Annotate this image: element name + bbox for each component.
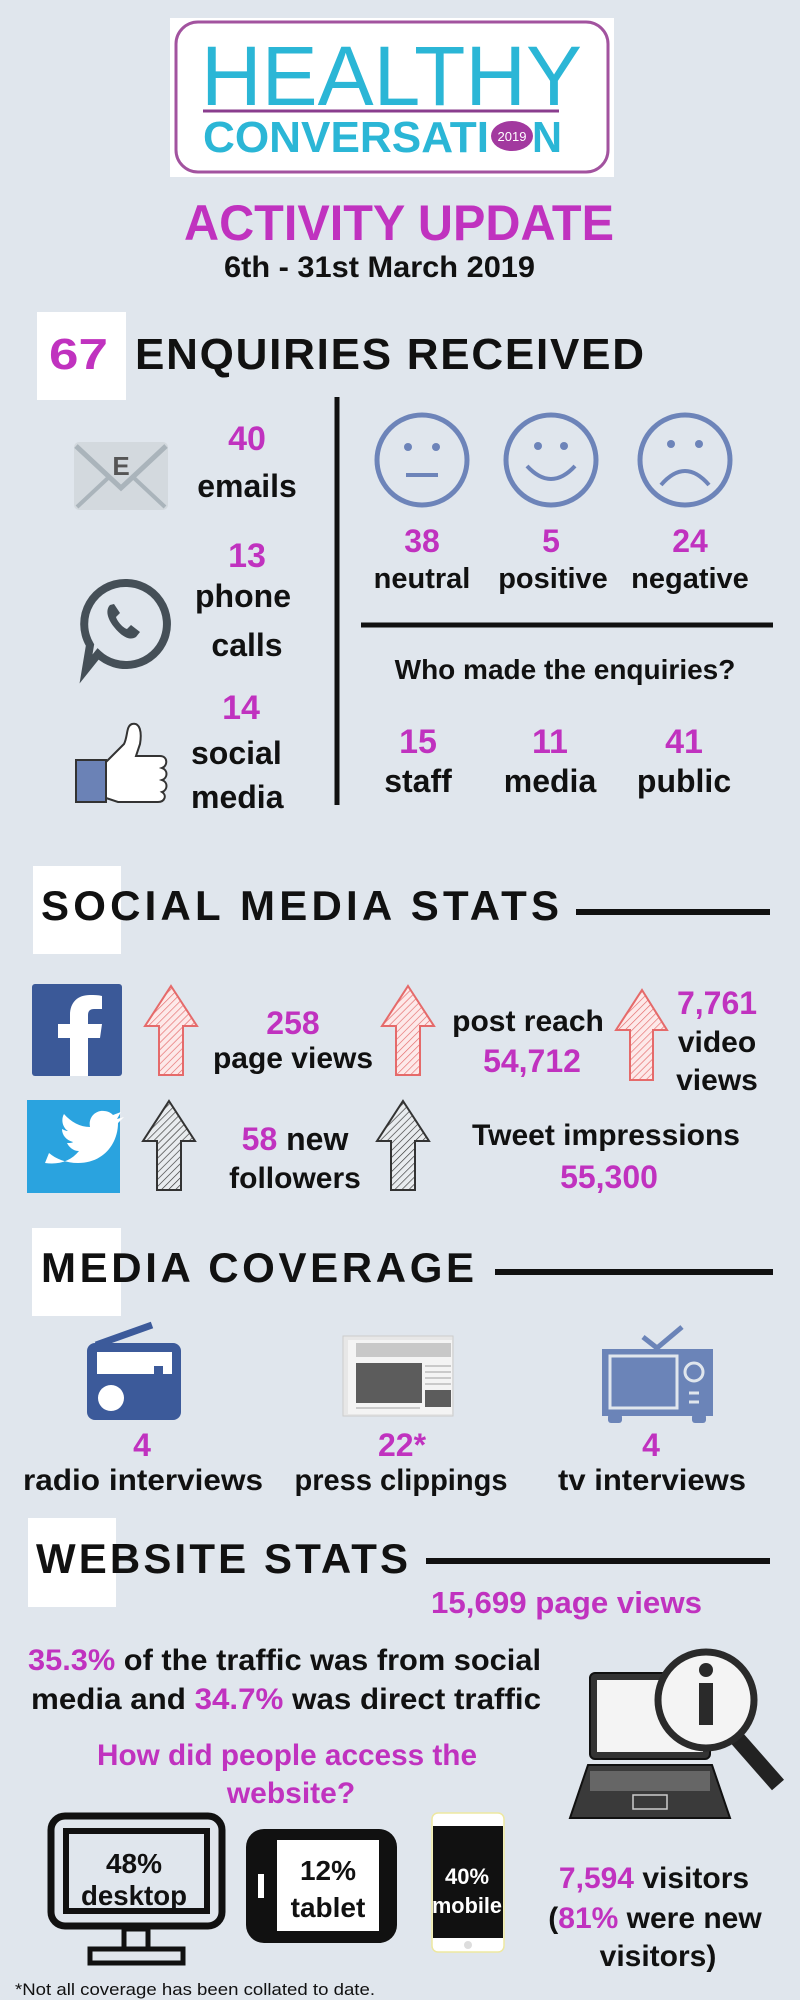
stat: page views: 15,699 page views <box>431 1585 702 1620</box>
icon: tablet 12%: tablet <box>291 1892 365 1923</box>
icon: phone <box>84 583 167 669</box>
stats: who: 41 <box>665 723 703 761</box>
stats: sentiment: neutral <box>374 563 470 595</box>
stat: new followers: followers <box>229 1162 361 1195</box>
date: 6th - 31st March 2019 <box>224 251 535 284</box>
heading: website stats: WEBSITE STATS <box>36 1535 408 1582</box>
text: traffic sources: 35.3% of the traffic was from social <box>28 1644 541 1677</box>
stat: phone calls: phone <box>195 578 291 614</box>
icon: tablet 12%: 12% <box>300 1855 356 1886</box>
stats: sentiment: negative <box>631 563 749 595</box>
icon: desktop 48%: desktop <box>81 1880 187 1911</box>
stats: sentiment: 5 <box>542 523 560 559</box>
stat: social media: 14 <box>222 689 260 727</box>
stat: visitors: 7,594 visitors <box>559 1862 749 1895</box>
icon: email: E <box>112 451 130 481</box>
heading: media coverage <box>32 1228 773 1316</box>
heading: enquiries: 67 <box>49 330 108 379</box>
icon: desktop 48%: 48% <box>106 1848 162 1879</box>
stat: phone calls: 13 <box>228 537 266 575</box>
stats: who: staff <box>384 763 452 799</box>
stat: visitors: visitors) <box>600 1940 716 1973</box>
subheading: access: website? <box>226 1777 355 1810</box>
stat: tweet impressions: 55,300 <box>560 1159 658 1195</box>
stat: visitors <box>548 1862 762 1973</box>
icon: mobile 40%: 40% <box>445 1864 489 1889</box>
stat: phone calls: calls <box>211 627 283 663</box>
stat: video views <box>676 985 758 1097</box>
arrows: facebook <box>145 986 667 1080</box>
stats: media coverage: press clippings <box>294 1464 508 1497</box>
icon: tv <box>602 1327 713 1423</box>
heading: social media stats <box>33 866 770 954</box>
icon: negative face <box>640 415 730 505</box>
stat: emails <box>197 420 297 504</box>
stats: sentiment: 24 <box>672 523 708 559</box>
stat: tweet impressions <box>472 1119 740 1195</box>
stats: media coverage <box>23 1427 746 1497</box>
stats: sentiment: positive <box>498 563 608 595</box>
text: traffic sources <box>28 1644 541 1716</box>
subheading: access <box>97 1739 477 1810</box>
heading: enquiries: ENQUIRIES RECEIVED <box>135 330 644 379</box>
stats: who: 15 <box>399 723 437 761</box>
stats: who: media <box>504 763 596 799</box>
stat: emails: 40 <box>228 420 266 458</box>
logo: CONVERSATI <box>203 113 489 162</box>
title: ACTIVITY UPDATE <box>184 195 614 251</box>
icon: desktop 48% <box>51 1816 222 1963</box>
stat: post reach: post reach <box>452 1005 604 1038</box>
stats: media coverage: 4 <box>133 1427 151 1463</box>
icon: email <box>74 442 168 510</box>
icon: tablet 12% <box>246 1829 397 1943</box>
icon: laptop with magnifier <box>570 1652 778 1818</box>
stat: social media <box>191 689 284 815</box>
stat: fb page views: 258 <box>266 1005 320 1041</box>
stat: new followers: 58 new <box>242 1121 348 1157</box>
icon: thumbs up <box>76 724 166 802</box>
stat: post reach: 54,712 <box>483 1043 581 1079</box>
stat: tweet impressions: Tweet impressions <box>472 1119 740 1152</box>
heading: enquiries <box>37 312 644 400</box>
text: traffic sources: media and 34.7% was direct traffic <box>31 1683 541 1716</box>
stats: who: public <box>637 763 731 799</box>
subheading: access: How did people access the <box>97 1739 477 1772</box>
arrows: twitter <box>143 1101 429 1190</box>
stat: video views: views <box>676 1064 758 1097</box>
icon: newspaper <box>343 1336 453 1416</box>
stat: fb page views <box>213 1005 373 1075</box>
stats: media coverage: tv interviews <box>558 1464 746 1497</box>
stats: who: 11 <box>532 723 568 761</box>
logo <box>170 18 614 177</box>
icon: neutral face <box>377 415 467 505</box>
stat: video views: video <box>678 1026 756 1059</box>
stat: fb page views: page views <box>213 1042 373 1075</box>
stats: media coverage: radio interviews <box>23 1464 263 1497</box>
stat: phone calls <box>195 537 291 663</box>
stats: who <box>384 723 731 799</box>
stat: visitors: (81% were new <box>548 1902 762 1935</box>
stats: media coverage: 22* <box>378 1427 427 1463</box>
stat: video views: 7,761 <box>677 985 757 1021</box>
stats: media coverage: 4 <box>642 1427 660 1463</box>
logo: HEALTHY <box>201 29 582 123</box>
heading: media coverage: MEDIA COVERAGE <box>41 1244 474 1291</box>
icon: radio <box>87 1325 181 1420</box>
icon: mobile 40% <box>432 1813 504 1952</box>
icon: twitter <box>27 1100 124 1193</box>
logo: 2019 <box>498 129 526 144</box>
footnote: *Not all coverage has been collated to date. <box>15 1980 375 1999</box>
subheading: who made enquiries: Who made the enquiries? <box>395 654 735 685</box>
icon: positive face <box>506 415 596 505</box>
stats: sentiment <box>374 523 749 595</box>
heading: social media stats: SOCIAL MEDIA STATS <box>41 882 559 929</box>
icon: facebook <box>32 984 122 1076</box>
stat: new followers <box>229 1121 361 1195</box>
stats: sentiment: 38 <box>404 523 440 559</box>
icon: mobile 40%: mobile <box>432 1893 502 1918</box>
logo: N <box>532 113 562 162</box>
stat: social media: media <box>191 779 284 815</box>
heading: website stats <box>28 1518 770 1607</box>
stat: emails: emails <box>197 468 297 504</box>
stat: social media: social <box>191 735 282 771</box>
stat: post reach <box>452 1005 604 1079</box>
